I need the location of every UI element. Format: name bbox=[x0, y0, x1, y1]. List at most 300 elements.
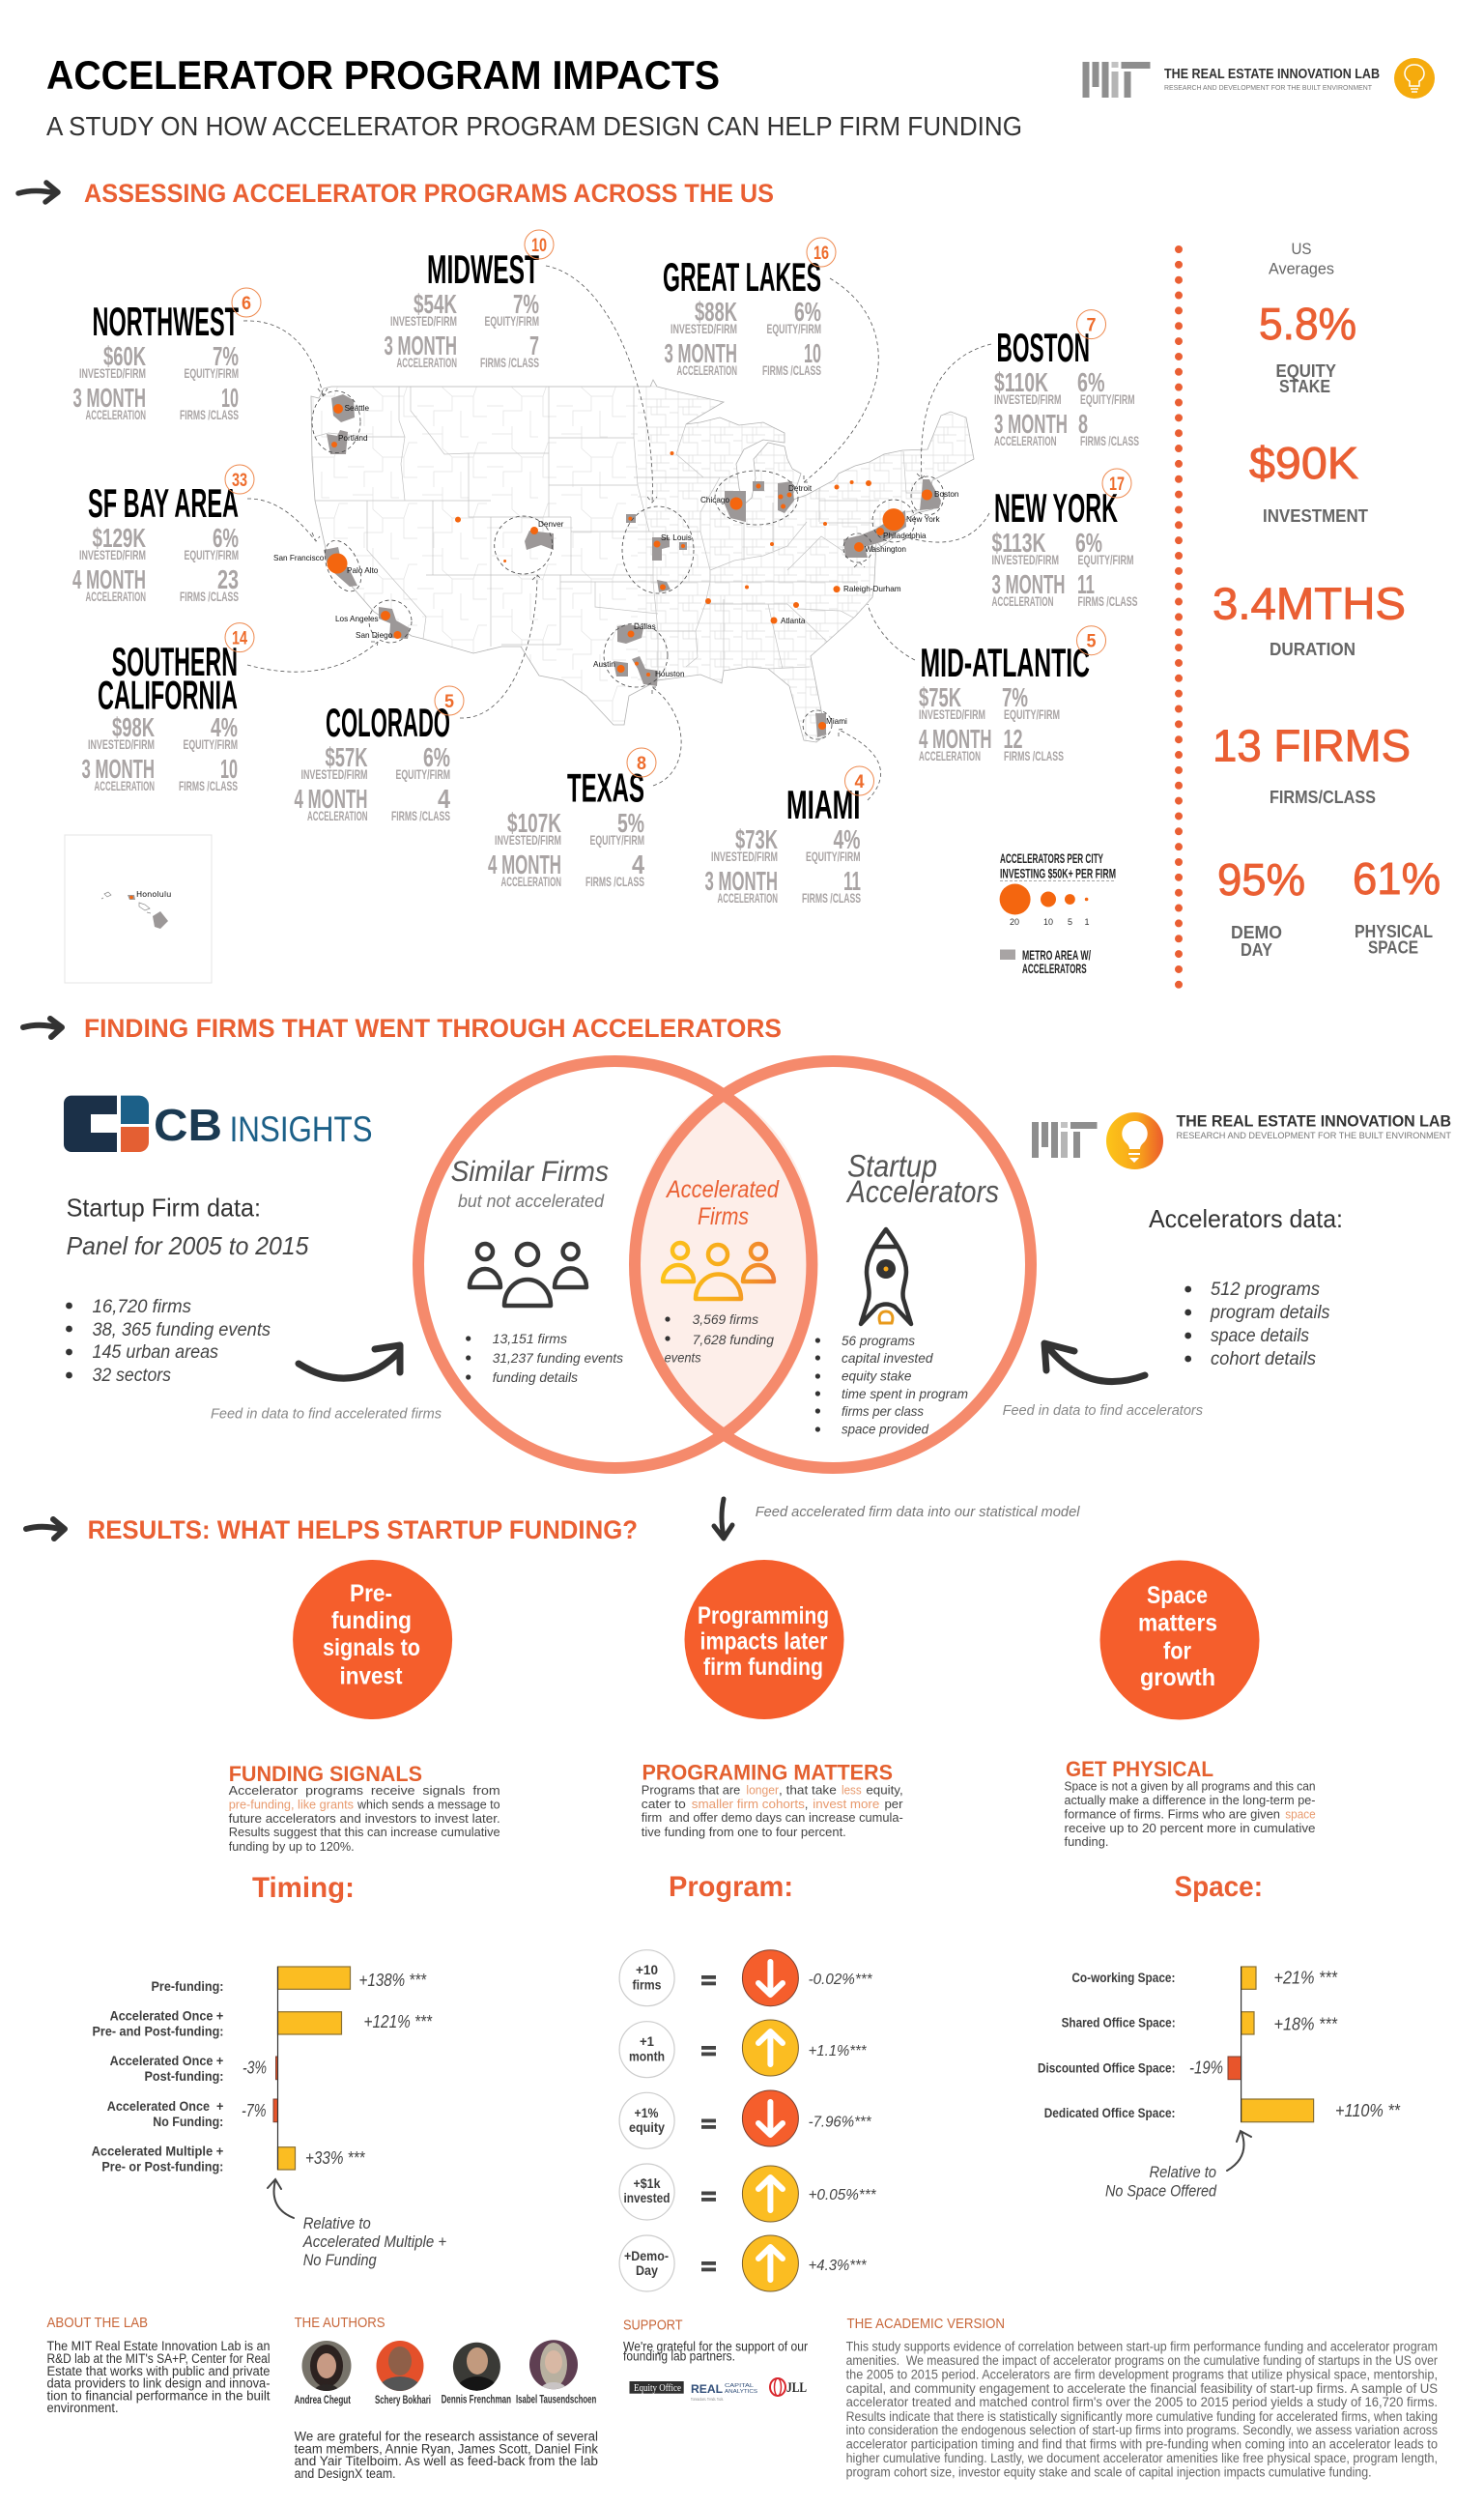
city labels: Raleigh-Durham bbox=[843, 585, 901, 593]
region: Texas: INVESTED/FIRM bbox=[495, 832, 561, 848]
region: Midwest: ACCELERATION bbox=[396, 355, 457, 370]
author names: Andrea Chegut bbox=[295, 2395, 351, 2406]
icon: people bbox=[470, 1244, 586, 1306]
paragraph: tion to financial performance in the built bbox=[46, 2389, 271, 2404]
icon: bulb bbox=[1394, 58, 1435, 99]
region: Boston: FIRMS /CLASS bbox=[1080, 433, 1139, 448]
bullet list: similar firms: 13,151 firms bbox=[493, 1331, 567, 1346]
region: Great Lakes: 3 MONTH bbox=[665, 338, 737, 368]
callout: space: growth bbox=[1140, 1664, 1215, 1691]
region: Mid-Atlantic bbox=[919, 626, 1105, 763]
icon: MIT bars bbox=[1082, 62, 1150, 98]
text block: accelerators data: Accelerators data: bbox=[1149, 1204, 1343, 1233]
label: startup accelerators: Startup bbox=[847, 1148, 937, 1183]
region: Northwest: NORTHWEST bbox=[93, 299, 239, 344]
region: Colorado: FIRMS /CLASS bbox=[391, 808, 450, 823]
heading: space: Space: bbox=[1175, 1871, 1263, 1903]
text block: startup firm data: Startup Firm data: bbox=[67, 1194, 261, 1223]
row: +$1k invested: invested bbox=[624, 2190, 671, 2205]
paragraph: the 2005 to 2015 period. Accelerators are firm development programs that utilize physical space, mentorship, bbox=[846, 2368, 1438, 2382]
lab name: THE REAL ESTATE INNOVATION LAB bbox=[1164, 67, 1380, 82]
region: Great Lakes: INVESTED/FIRM bbox=[671, 321, 737, 336]
lab tagline: RESEARCH AND DEVELOPMENT FOR THE BUILT ENVIRONMENT bbox=[1177, 1131, 1451, 1141]
paragraph: equity, bbox=[866, 1783, 903, 1798]
region: New York bbox=[991, 469, 1138, 609]
value labels: +33% *** bbox=[305, 2148, 365, 2168]
region: Midwest: INVESTED/FIRM bbox=[390, 313, 457, 329]
region: SF Bay Area: 23 bbox=[217, 564, 239, 594]
legend: INVESTING $50K+ PER FIRM bbox=[1000, 866, 1116, 881]
region: Midwest: MIDWEST bbox=[427, 246, 539, 292]
region: Colorado: 4 bbox=[438, 784, 450, 814]
label: similar firms bbox=[451, 1156, 609, 1211]
legend: 20 bbox=[1010, 917, 1019, 927]
city labels: Denver bbox=[538, 520, 564, 529]
region: Mid-Atlantic: $75K bbox=[919, 682, 961, 712]
heading: ABOUT THE LAB bbox=[46, 2316, 148, 2331]
stat: firms per class bbox=[1213, 721, 1411, 807]
arrow: down to results bbox=[714, 1499, 732, 1539]
bar chart: timing bbox=[92, 1967, 446, 2269]
logo: Real Capital Analytics: Transactions. Trends. Tools. bbox=[691, 2397, 724, 2402]
region: Mid-Atlantic: INVESTED/FIRM bbox=[919, 706, 985, 722]
region: Texas: $107K bbox=[507, 808, 561, 838]
region: Mid-Atlantic: EQUITY/FIRM bbox=[1004, 706, 1060, 722]
region: New York: 6% bbox=[1075, 528, 1102, 558]
legend bbox=[1000, 850, 1116, 976]
region: Colorado: EQUITY/FIRM bbox=[396, 766, 450, 782]
chart: program effects bbox=[619, 1950, 876, 2291]
region: Southern California: SOUTHERN bbox=[112, 639, 238, 684]
paragraph: , that take bbox=[779, 1783, 837, 1798]
region: Northwest: 7% bbox=[213, 341, 239, 371]
region: Northwest: 6 bbox=[242, 294, 251, 314]
region: Mid-Atlantic: FIRMS /CLASS bbox=[1004, 748, 1064, 763]
region: Boston bbox=[994, 310, 1139, 448]
right circle bbox=[635, 1061, 1031, 1468]
callout: programming: impacts later bbox=[699, 1628, 828, 1656]
region: Southern California: ACCELERATION bbox=[95, 778, 155, 793]
category labels: Accelerated Once + bbox=[107, 2098, 223, 2114]
legend: ACCELERATORS PER CITY bbox=[1000, 850, 1103, 866]
photo: Dennis Frenchman bbox=[452, 2343, 500, 2391]
author names bbox=[295, 2395, 596, 2406]
paragraph: which sends a message to bbox=[357, 1798, 500, 1812]
region: Midwest: FIRMS /CLASS bbox=[480, 355, 539, 370]
city labels: New York bbox=[906, 515, 940, 524]
intersection fill bbox=[630, 1089, 817, 1440]
paragraph: firm and offer demo days can increase cumula- bbox=[642, 1810, 903, 1825]
panel title: US bbox=[1291, 240, 1312, 258]
city labels: Miami bbox=[826, 717, 847, 726]
heading text: FINDING FIRMS THAT WENT THROUGH ACCELERATORS bbox=[84, 1014, 782, 1043]
map: United States accelerators bbox=[243, 266, 991, 800]
caption: accelerators feed: Feed in data to find accelerators bbox=[1003, 1402, 1203, 1419]
row: +$1k invested bbox=[619, 2164, 876, 2222]
category labels: Accelerated Once + bbox=[110, 2008, 223, 2024]
logo: JLL: JLL bbox=[786, 2380, 807, 2396]
region: SF Bay Area: SF BAY AREA bbox=[88, 480, 239, 526]
region: SF Bay Area: 6% bbox=[213, 523, 239, 553]
logo: Real Capital Analytics: CAPITAL bbox=[725, 2383, 754, 2389]
paragraph bbox=[46, 2339, 271, 2415]
bullet list: accelerated firms: 3,569 firms bbox=[693, 1311, 758, 1327]
logo: Equity Office: Equity Office bbox=[634, 2383, 681, 2394]
logo: Real Capital Analytics: REAL bbox=[691, 2382, 723, 2396]
region: Miami: MIAMI bbox=[786, 782, 860, 827]
paragraph: future accelerators and investors to invest later. bbox=[229, 1811, 500, 1826]
paragraph: less bbox=[842, 1783, 862, 1798]
accelerator dots bbox=[327, 404, 932, 730]
paragraph bbox=[229, 1783, 500, 1854]
bullet list: accelerators: 56 programs bbox=[842, 1333, 915, 1348]
text block: startup firm data bbox=[66, 1194, 309, 1386]
label: similar firms: but not accelerated bbox=[458, 1192, 605, 1211]
arrow: feed into accelerators bbox=[1044, 1343, 1145, 1382]
annotation: relative to: Relative to bbox=[1150, 2163, 1216, 2181]
annotation: relative to: Accelerated Multiple + bbox=[302, 2232, 446, 2251]
outline bbox=[311, 380, 974, 742]
city labels: Boston bbox=[934, 490, 959, 499]
label: similar firms: Similar Firms bbox=[451, 1156, 609, 1188]
region: Great Lakes: 10 bbox=[804, 338, 821, 368]
text block: accelerators data bbox=[1149, 1204, 1343, 1369]
icon: accelerated people bbox=[663, 1243, 774, 1299]
row: +1 month: month bbox=[629, 2049, 665, 2064]
category labels: Pre- or Post-funding: bbox=[101, 2159, 223, 2174]
value labels bbox=[1189, 1969, 1401, 2120]
state borders bbox=[314, 387, 932, 680]
bullet list: accelerators: space provided bbox=[842, 1422, 929, 1437]
region: New York: ACCELERATION bbox=[991, 593, 1053, 609]
logo: Real Capital Analytics bbox=[691, 2382, 758, 2402]
callout: pre-funding bbox=[293, 1560, 452, 1719]
callout: space: Space bbox=[1147, 1582, 1208, 1609]
subtitle: A STUDY ON HOW ACCELERATOR PROGRAM DESIGN CAN HELP FIRM FUNDING bbox=[46, 111, 1022, 141]
region: Southern California: 3 MONTH bbox=[81, 754, 155, 784]
value labels bbox=[242, 1971, 433, 2168]
value labels: +110% ** bbox=[1335, 2101, 1401, 2120]
region: New York: INVESTED/FIRM bbox=[991, 552, 1059, 567]
heading: THE ACADEMIC VERSION bbox=[846, 2317, 1005, 2332]
logo: MIT lab large bbox=[1032, 1112, 1451, 1169]
stat: physical space bbox=[1353, 853, 1441, 958]
region: Colorado: 6% bbox=[423, 742, 450, 772]
region: Texas bbox=[488, 748, 656, 889]
legend: ACCELERATORS bbox=[1022, 961, 1087, 976]
bullet list: accelerators: firms per class bbox=[842, 1403, 924, 1419]
region: New York: FIRMS /CLASS bbox=[1078, 593, 1138, 609]
stat: duration: DURATION bbox=[1270, 640, 1356, 659]
annotation: relative to bbox=[268, 2179, 446, 2269]
row: +1% equity: -7.96%*** bbox=[809, 2115, 871, 2131]
paragraph: funding by up to 120%. bbox=[229, 1839, 355, 1854]
bullet list: similar firms bbox=[466, 1331, 623, 1385]
row: +10 firms: +10 bbox=[636, 1962, 658, 1977]
region: Colorado: ACCELERATION bbox=[307, 808, 367, 823]
region: Northwest: $60K bbox=[103, 341, 146, 371]
paragraph bbox=[623, 2340, 808, 2364]
paragraph: Accelerator programs receive signals from bbox=[229, 1783, 500, 1798]
bullet list: accelerators: equity stake bbox=[842, 1368, 912, 1384]
region: SF Bay Area bbox=[72, 465, 254, 604]
stat: duration: 3.4MTHS bbox=[1213, 579, 1406, 629]
stat: demo day: DAY bbox=[1241, 940, 1272, 960]
city labels: Austin bbox=[593, 660, 615, 669]
bullet list: CB data: 16,720 firms bbox=[93, 1297, 191, 1317]
region: Texas: 8 bbox=[637, 754, 646, 774]
region: Mid-Atlantic: MID-ATLANTIC bbox=[920, 640, 1090, 685]
bullet list: accelerator data: space details bbox=[1211, 1326, 1309, 1346]
paragraph bbox=[1065, 1779, 1316, 1849]
photo: Isabel Tausendschoen bbox=[529, 2340, 578, 2389]
city labels: Palo Alto bbox=[347, 566, 379, 575]
value labels: +21% *** bbox=[1273, 1969, 1338, 1988]
paragraph: amenities. We measured the impact of accelerator programs on the cumulative funding of startups in the US over bbox=[846, 2353, 1438, 2368]
region: SF Bay Area: 4 MONTH bbox=[72, 564, 146, 594]
city labels bbox=[273, 404, 959, 726]
category labels: Discounted Office Space: bbox=[1038, 2059, 1175, 2075]
annotation: relative to: No Funding bbox=[303, 2251, 377, 2269]
row: +$1k invested: +0.05%*** bbox=[809, 2187, 876, 2203]
section heading: finding firms bbox=[23, 1014, 782, 1043]
stat: firms per class: FIRMS/CLASS bbox=[1270, 788, 1376, 807]
panel: US averages bbox=[1213, 240, 1441, 960]
region: Great Lakes: $88K bbox=[695, 297, 737, 327]
paragraph: higher cumulative funding. Lastly, we document accelerator amenities like free physical space, program length, bbox=[846, 2451, 1438, 2465]
value labels: +121% *** bbox=[363, 2012, 433, 2031]
bars bbox=[273, 1967, 350, 2170]
paragraph bbox=[642, 1783, 903, 1839]
venn diagram bbox=[418, 1061, 1031, 1468]
heading: GET PHYSICAL bbox=[1066, 1757, 1213, 1781]
header logo: MIT Real Estate Innovation Lab bbox=[1082, 58, 1435, 99]
region: Colorado: 5 bbox=[444, 692, 454, 712]
paragraph: space bbox=[1285, 1807, 1316, 1822]
region: Southern California: INVESTED/FIRM bbox=[88, 736, 155, 752]
callout: pre-funding: invest bbox=[340, 1663, 403, 1690]
callout: space bbox=[1099, 1560, 1260, 1720]
row: +$1k invested: +$1k bbox=[634, 2175, 661, 2191]
region: Mid-Atlantic: 4 MONTH bbox=[919, 724, 991, 754]
bullet list: CB data: 145 urban areas bbox=[93, 1342, 218, 1363]
region: Great Lakes: GREAT LAKES bbox=[663, 254, 821, 300]
arrow: feed into similar firms bbox=[299, 1345, 400, 1378]
row: +1% equity: equity bbox=[629, 2119, 665, 2135]
bullet list: accelerators bbox=[815, 1333, 968, 1437]
region: Miami: 3 MONTH bbox=[705, 866, 778, 896]
panel title: Averages bbox=[1269, 260, 1334, 278]
city labels: Atlanta bbox=[781, 617, 806, 625]
region: Southern California: 14 bbox=[232, 629, 247, 649]
legend: 5 bbox=[1068, 917, 1072, 927]
paragraph: This study supports evidence of correlation between start-up firm performance funding and accelerator program bbox=[846, 2340, 1438, 2354]
region: Texas: FIRMS /CLASS bbox=[585, 874, 644, 889]
acknowledgement bbox=[295, 2430, 598, 2481]
region: New York: NEW YORK bbox=[994, 485, 1118, 531]
label: accelerated firms: Accelerated bbox=[665, 1176, 780, 1203]
category labels bbox=[1038, 1970, 1176, 2120]
callout: programming: firm funding bbox=[703, 1654, 823, 1681]
region: Texas: 5% bbox=[617, 808, 644, 838]
left circle bbox=[418, 1061, 812, 1468]
panel title bbox=[1269, 240, 1334, 278]
region: Miami: $73K bbox=[735, 824, 778, 854]
region: Great Lakes: ACCELERATION bbox=[676, 362, 737, 378]
region: Miami: FIRMS /CLASS bbox=[802, 890, 861, 906]
region: Southern California: 4% bbox=[211, 712, 238, 742]
paragraph: program cohort size, investor equity stake and scale of capital injection impacts cumulative funding. bbox=[846, 2465, 1372, 2480]
icon: rocket bbox=[861, 1229, 911, 1324]
callout: programming bbox=[684, 1560, 844, 1719]
region: Miami: EQUITY/FIRM bbox=[806, 849, 860, 864]
paragraph: tive funding from one to four percent. bbox=[642, 1825, 846, 1839]
icon: bulb bbox=[1106, 1112, 1163, 1169]
text block: get physical bbox=[1065, 1757, 1316, 1849]
paragraph: actually make a difference in the long-term pe- bbox=[1065, 1793, 1316, 1807]
city labels: Portland bbox=[338, 434, 368, 443]
callout: space: matters bbox=[1138, 1610, 1217, 1637]
paragraph: into consideration the endogenous selection of start-up firms into programs. Secondly, we assess variation across bbox=[846, 2423, 1438, 2437]
paragraph: funding. bbox=[1065, 1834, 1109, 1849]
stat: equity stake bbox=[1259, 299, 1356, 396]
paragraph: founding lab partners. bbox=[623, 2349, 735, 2364]
region: Northwest: 3 MONTH bbox=[73, 383, 146, 413]
bullet list: accelerator data bbox=[1184, 1280, 1330, 1369]
region: Colorado: $57K bbox=[325, 742, 367, 772]
region: Southern California: EQUITY/FIRM bbox=[184, 736, 238, 752]
stat: investment bbox=[1249, 438, 1368, 526]
city labels: Dallas bbox=[634, 622, 656, 631]
region: Colorado: INVESTED/FIRM bbox=[301, 766, 367, 782]
region: Northwest: EQUITY/FIRM bbox=[184, 365, 239, 381]
category labels: Pre- and Post-funding: bbox=[93, 2024, 224, 2039]
acknowledgement: We are grateful for the research assistance of several bbox=[295, 2430, 598, 2444]
region: Midwest bbox=[385, 230, 554, 370]
paragraph: Results indicate that there is statistically significantly more cumulative funding for accelerated firms, when taking bbox=[846, 2409, 1438, 2424]
caption: statistical model: Feed accelerated firm data into our statistical model bbox=[756, 1504, 1080, 1520]
county texture bbox=[309, 377, 976, 744]
region: Colorado: 4 MONTH bbox=[294, 784, 367, 814]
region: Miami: ACCELERATION bbox=[717, 890, 778, 906]
stat: demo day bbox=[1217, 854, 1305, 960]
region: Great Lakes bbox=[663, 238, 836, 378]
region: Boston: 3 MONTH bbox=[994, 409, 1068, 439]
region: New York: 17 bbox=[1109, 475, 1125, 495]
acknowledgement: team members, Annie Ryan, James Scott, Daniel Fink bbox=[295, 2442, 598, 2457]
legend: METRO AREA W/ bbox=[1022, 947, 1091, 963]
row: +10 firms bbox=[619, 1950, 872, 2006]
lab name: THE REAL ESTATE INNOVATION LAB bbox=[1177, 1112, 1451, 1131]
stat: physical space: PHYSICAL bbox=[1355, 922, 1433, 941]
paragraph: R&D lab at the MIT's SA+P, Center for Real bbox=[46, 2351, 271, 2366]
inset: Hawaii bbox=[65, 835, 212, 983]
callout: pre-funding: funding bbox=[331, 1607, 412, 1634]
annotation: relative to bbox=[1105, 2131, 1251, 2201]
bullet list: accelerator data: 512 programs bbox=[1211, 1280, 1320, 1300]
lab tagline: RESEARCH AND DEVELOPMENT FOR THE BUILT ENVIRONMENT bbox=[1164, 83, 1372, 92]
logo: CB Insights bbox=[64, 1096, 373, 1152]
region: SF Bay Area: FIRMS /CLASS bbox=[180, 589, 239, 604]
category labels: Accelerated Multiple + bbox=[92, 2144, 223, 2159]
row: +Demo-Day bbox=[619, 2235, 867, 2291]
region: SF Bay Area: INVESTED/FIRM bbox=[79, 547, 146, 562]
region: Colorado bbox=[294, 686, 464, 823]
label: startup accelerators bbox=[845, 1148, 999, 1209]
bullet list: accelerated firms: 7,628 funding bbox=[693, 1332, 774, 1347]
paragraph: environment. bbox=[46, 2401, 118, 2415]
photo: Andrea Chegut bbox=[301, 2341, 352, 2391]
row: +10 firms: -0.02%*** bbox=[809, 1972, 872, 1988]
city labels: San Francisco bbox=[273, 554, 325, 562]
icon: MIT bars bbox=[1032, 1122, 1098, 1158]
label: accelerated firms bbox=[665, 1176, 780, 1230]
row: +Demo-Day: +Demo- bbox=[624, 2248, 669, 2263]
heading: FUNDING SIGNALS bbox=[229, 1762, 422, 1786]
row: +1 month: +1.1%*** bbox=[809, 2043, 867, 2059]
region: Mid-Atlantic: 12 bbox=[1003, 724, 1022, 754]
bullet list: accelerator data: program details bbox=[1210, 1303, 1330, 1323]
paragraph: per bbox=[885, 1797, 903, 1811]
stat: physical space: 61% bbox=[1353, 853, 1441, 904]
category labels: No Funding: bbox=[153, 2114, 223, 2129]
region: Boston: $110K bbox=[994, 367, 1048, 397]
heading: PROGRAMING MATTERS bbox=[642, 1761, 893, 1785]
region: Northwest: ACCELERATION bbox=[85, 407, 146, 422]
paragraph: Results suggest that this can increase cumulative bbox=[229, 1825, 500, 1839]
region: New York: EQUITY/FIRM bbox=[1078, 552, 1134, 567]
paragraph: , bbox=[805, 1797, 808, 1811]
city labels: Detroit bbox=[788, 484, 813, 493]
category labels bbox=[92, 1978, 223, 2174]
value labels: -3% bbox=[243, 2059, 267, 2078]
region: Boston: 6% bbox=[1077, 367, 1105, 397]
region: Midwest: 10 bbox=[531, 236, 547, 256]
region: Northwest: 10 bbox=[221, 383, 239, 413]
city labels: Philadelphia bbox=[883, 532, 927, 540]
bullet list: CB data bbox=[66, 1297, 271, 1386]
city labels: St. Louis bbox=[661, 533, 692, 542]
region: Texas: EQUITY/FIRM bbox=[589, 832, 644, 848]
stat: equity stake: STAKE bbox=[1279, 377, 1330, 396]
paragraph: receive up to 20 percent more in cumulative bbox=[1065, 1821, 1316, 1835]
heading: timing: Timing: bbox=[252, 1872, 355, 1904]
value labels: -7% bbox=[242, 2101, 267, 2120]
footer: support bbox=[623, 2318, 808, 2402]
region: SF Bay Area: EQUITY/FIRM bbox=[184, 547, 239, 562]
category labels: Accelerated Once + bbox=[110, 2053, 223, 2068]
callout: pre-funding: Pre- bbox=[350, 1580, 392, 1607]
inset: Hawaii: Honolulu bbox=[136, 889, 171, 899]
value labels: +18% *** bbox=[1273, 2015, 1338, 2034]
photo: Schery Bokhari bbox=[377, 2341, 423, 2391]
region: New York: 11 bbox=[1077, 569, 1095, 599]
region: Texas: TEXAS bbox=[567, 765, 644, 810]
region: Southern California: FIRMS /CLASS bbox=[179, 778, 238, 793]
category labels: Shared Office Space: bbox=[1062, 2015, 1176, 2030]
category labels: Post-funding: bbox=[145, 2068, 224, 2084]
region: Texas: 4 bbox=[632, 849, 644, 879]
region: Boston: INVESTED/FIRM bbox=[994, 391, 1061, 407]
stat: equity stake: 5.8% bbox=[1259, 299, 1356, 349]
value labels: -19% bbox=[1189, 2059, 1223, 2078]
region: Texas: ACCELERATION bbox=[500, 874, 561, 889]
text block: funding signals bbox=[229, 1762, 500, 1854]
region: Great Lakes: 6% bbox=[794, 297, 821, 327]
region: Miami: 4% bbox=[833, 824, 861, 854]
bullet list: accelerated firms: events bbox=[665, 1350, 701, 1366]
region: Boston: EQUITY/FIRM bbox=[1080, 391, 1134, 407]
